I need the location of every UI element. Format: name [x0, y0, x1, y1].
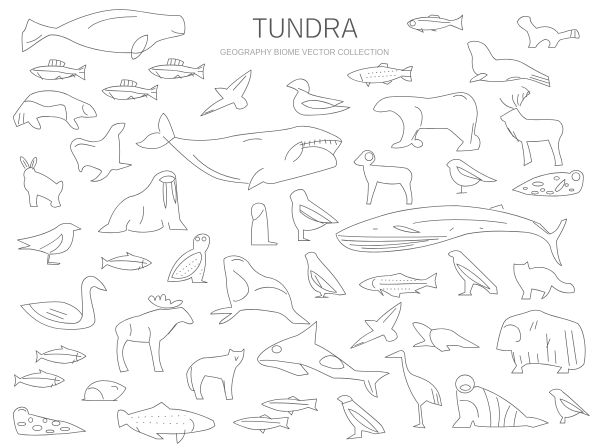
- icon: sea otter: [413, 323, 479, 351]
- icon: grayling fish 2: [149, 59, 205, 79]
- icon: seal bottom left: [13, 407, 86, 435]
- icon: raven: [17, 223, 81, 265]
- icon: banded seal: [453, 375, 548, 427]
- icon: small plover: [549, 389, 589, 423]
- icon: ermine: [517, 16, 579, 47]
- icon: small salmon 1: [233, 415, 289, 433]
- icon: beluga whale: [22, 9, 185, 59]
- icon: salmon: [347, 63, 413, 87]
- icon: fish mid: [102, 252, 152, 270]
- icon: crane: [385, 351, 442, 428]
- icon: moose: [116, 294, 193, 372]
- icon: brown trout: [118, 402, 215, 443]
- icon: gull standing: [290, 190, 338, 241]
- icon: duck: [287, 79, 350, 115]
- icon: grayling fish 3: [102, 80, 158, 100]
- icon: snowy owl: [168, 234, 210, 283]
- icon: finch: [447, 159, 497, 193]
- icon: ptarmigan: [305, 252, 346, 297]
- title: TUNDRA: [252, 13, 359, 45]
- icon: grayling fish 1: [30, 60, 86, 80]
- icon: fish left 2: [14, 370, 64, 387]
- icon: ringed seal: [512, 170, 583, 196]
- icon: walrus: [98, 171, 187, 233]
- icon: sea lion top right: [468, 41, 550, 87]
- icon: blue whale: [336, 205, 567, 266]
- icon: fur seal large: [211, 256, 310, 324]
- icon: marmot: [251, 203, 277, 245]
- icon: arctic hare: [20, 157, 63, 207]
- icon: trout: [359, 273, 437, 297]
- icon: musk ox: [497, 310, 585, 373]
- subtitle: GEOGRAPHY BIOME VECTOR COLLECTION: [220, 47, 389, 57]
- icon: eagle: [337, 395, 385, 439]
- icon: bowhead whale: [136, 113, 342, 190]
- icon: swan: [21, 276, 107, 329]
- icon: fur seal: [71, 123, 132, 181]
- icon: polar bear: [373, 93, 480, 151]
- icon: seagull 2: [351, 302, 401, 348]
- icon: falcon: [448, 251, 497, 295]
- icon: small salmon 2: [262, 396, 318, 415]
- icon: seagull 1: [201, 70, 251, 116]
- icon: arctic fox: [514, 262, 574, 299]
- icon: caribou: [500, 87, 563, 166]
- icon: orca: [257, 321, 389, 397]
- icon: wolverine: [13, 91, 96, 129]
- icon: bighorn sheep: [354, 150, 412, 204]
- icon: lemming: [82, 381, 126, 401]
- icon: herring: [407, 15, 463, 32]
- icon: arctic wolf: [187, 349, 244, 400]
- icon: fish left 1: [36, 346, 86, 363]
